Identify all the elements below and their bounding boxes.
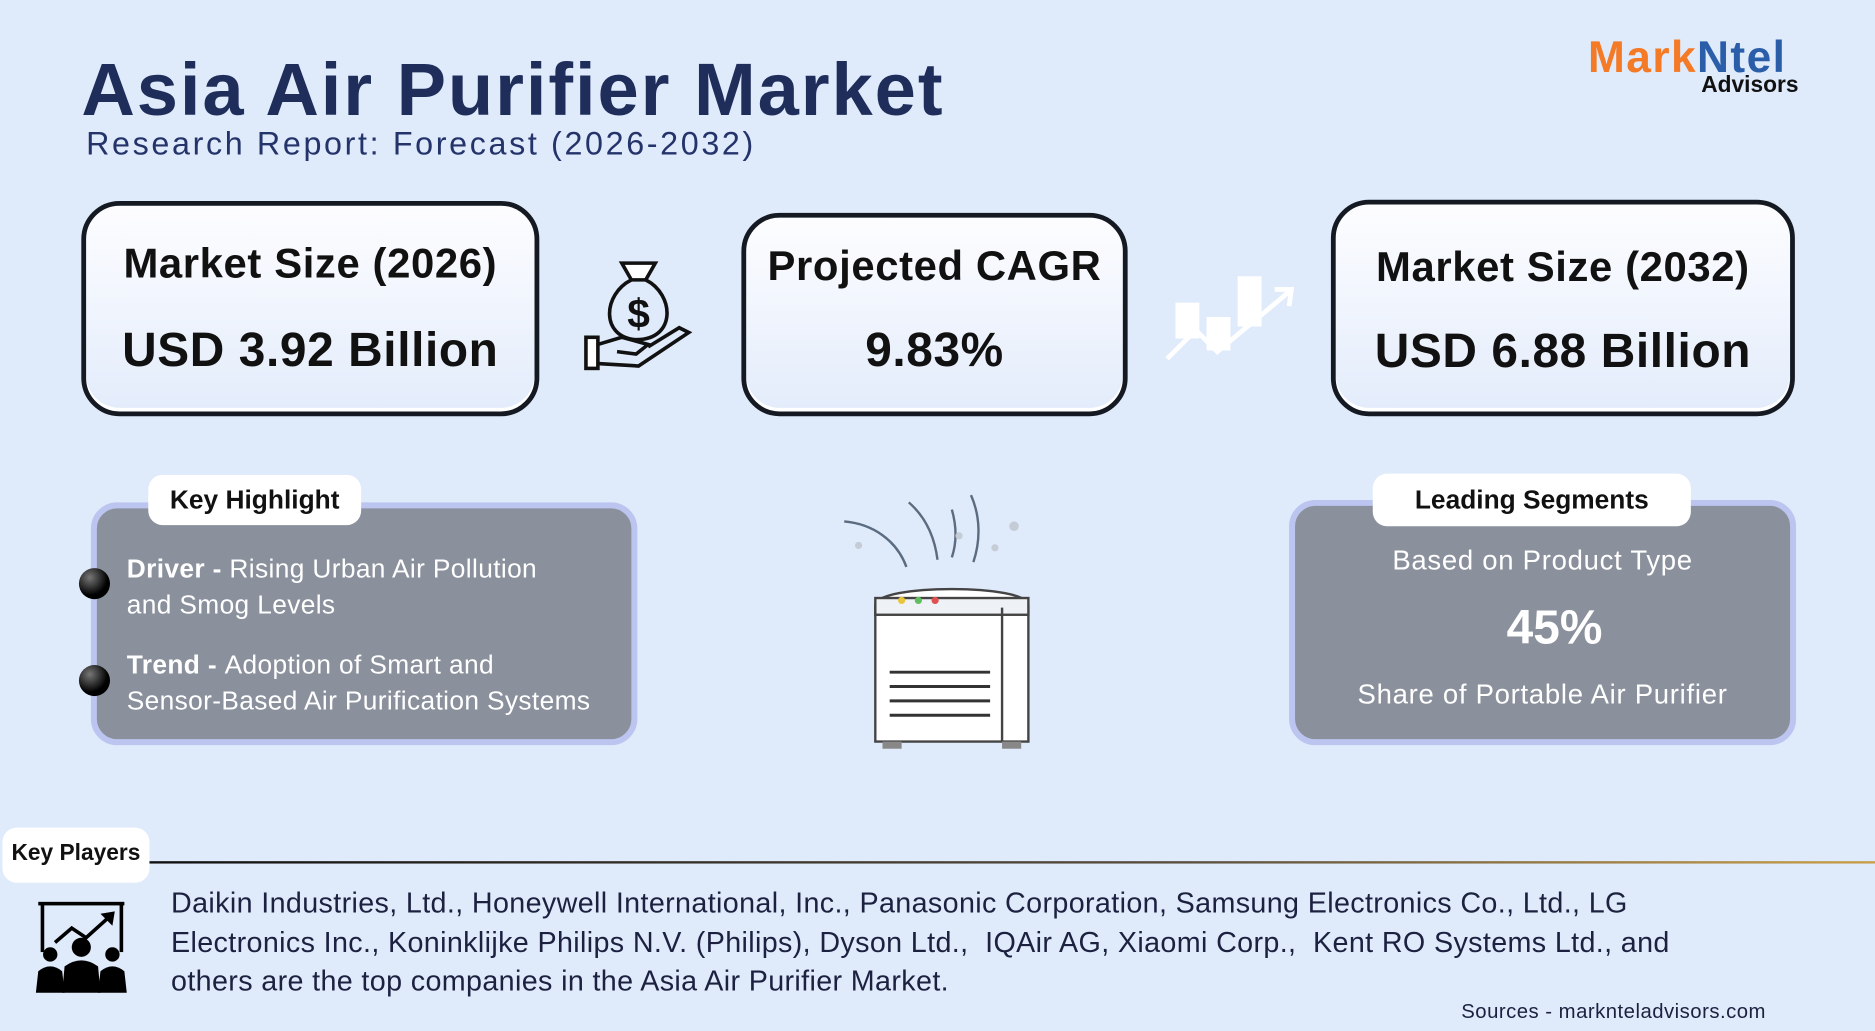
key players text: Daikin Industries, Ltd., Honeywell International, Inc., Panasonic Corporation, Samsung Electronics Co., Ltd., LG: [171, 887, 1628, 920]
box: market size 2026: USD 3.92 Billion: [122, 324, 498, 377]
logo: MarkNtel: [1588, 32, 1786, 81]
driver text: and Smog Levels: [127, 590, 335, 620]
subtitle: Research Report: Forecast (2026-2032): [86, 126, 756, 161]
key players text: Electronics Inc., Koninklijke Philips N.V. (Philips), Dyson Ltd., IQAir AG, Xiaomi Corp., Kent RO Systems Ltd., and: [171, 926, 1670, 959]
tab: key highlight: [148, 475, 361, 525]
bullet 2: [79, 665, 110, 696]
key players text: [171, 887, 1670, 998]
tab: key highlight: Key Highlight: [170, 484, 339, 514]
key players text: others are the top companies in the Asia Air Purifier Market.: [171, 965, 949, 998]
title: Asia Air Purifier Market: [81, 49, 944, 132]
trend text: [127, 649, 590, 715]
tab: key players: Key Players: [12, 841, 140, 866]
box: market size 2026: Market Size (2026): [123, 240, 497, 287]
icon: money bag in hand: $: [627, 291, 650, 337]
driver text: Driver - Rising Urban Air Pollution: [127, 554, 537, 584]
segment label: Share of Portable Air Purifier: [1358, 678, 1728, 709]
segment share: 45%: [1507, 602, 1602, 654]
trend text: Trend - Adoption of Smart and: [127, 649, 494, 679]
logo: Advisors: [1701, 73, 1798, 98]
segment basis: Based on Product Type: [1392, 544, 1693, 575]
icon: key players: [36, 902, 127, 993]
tab: leading segments: [1373, 474, 1691, 526]
panel: key highlight: [91, 502, 637, 745]
bullet 1: [79, 568, 110, 599]
icon: growth chart: [1166, 276, 1294, 360]
box: market size 2026: [81, 201, 539, 416]
box: market size 2032: Market Size (2032): [1376, 244, 1750, 291]
box: projected CAGR: [741, 213, 1128, 416]
panel: leading segments: [1289, 500, 1796, 745]
sources: Sources - marknteladvisors.com: [1461, 1000, 1766, 1023]
tab: key players: [2, 828, 149, 883]
tab: leading segments: Leading Segments: [1415, 484, 1649, 514]
box: market size 2032: [1331, 200, 1795, 416]
box: projected CAGR: 9.83%: [865, 324, 1004, 377]
driver text: [127, 554, 537, 620]
icon: money bag in hand: [584, 261, 692, 370]
icon: air purifier: [844, 494, 1030, 749]
box: market size 2032: USD 6.88 Billion: [1375, 325, 1751, 378]
trend text: Sensor-Based Air Purification Systems: [127, 685, 590, 715]
box: projected CAGR: Projected CAGR: [768, 243, 1101, 289]
